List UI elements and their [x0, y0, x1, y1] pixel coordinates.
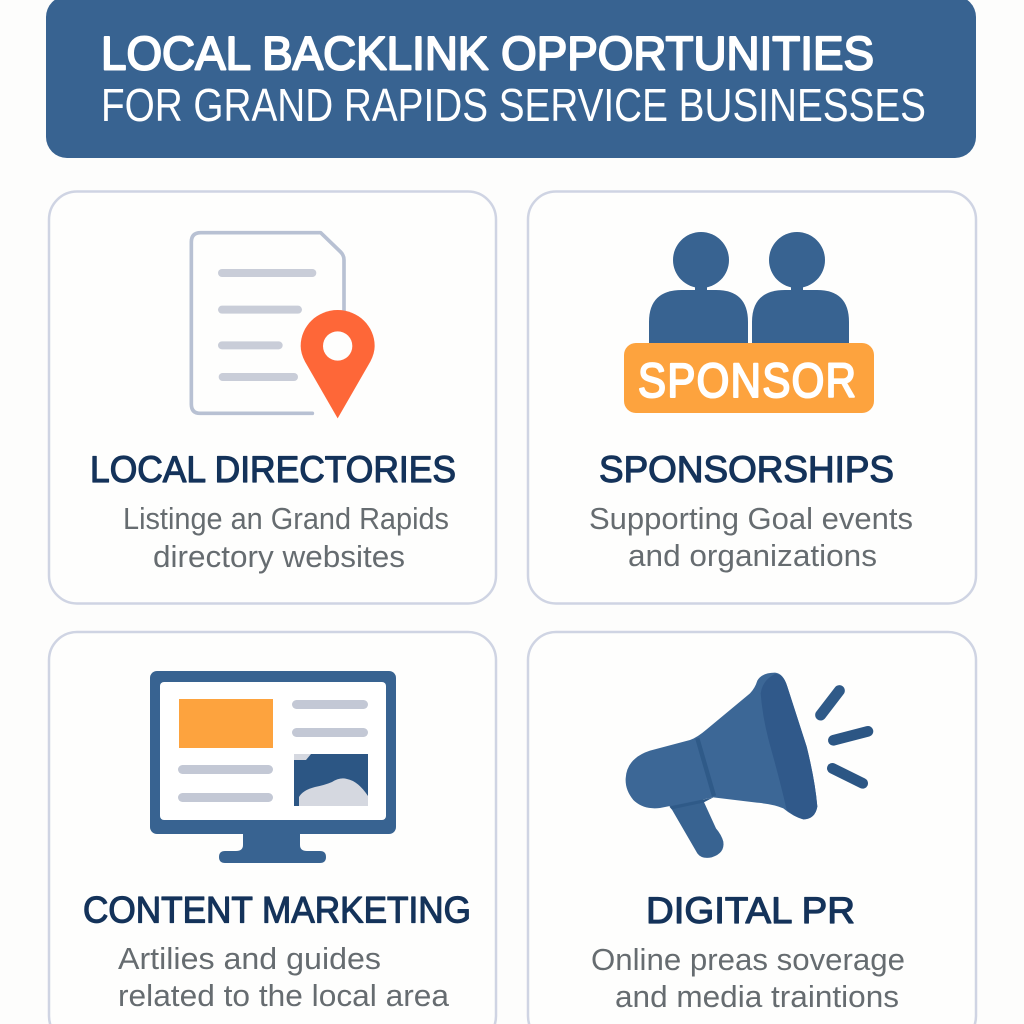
description: local directories: directory websites	[153, 539, 405, 574]
description: sponsorships	[589, 501, 913, 573]
icon: monitor with web page	[150, 671, 396, 863]
panel: content marketing	[49, 632, 496, 1024]
icon: sponsor people with badge	[624, 232, 874, 413]
panel: local directories	[49, 192, 496, 604]
heading: digital pr: DIGITAL PR	[646, 889, 855, 931]
panel: digital pr	[528, 632, 976, 1024]
title banner	[46, 0, 976, 158]
description: content marketing: related to the local area	[118, 978, 450, 1013]
description: content marketing	[118, 941, 450, 1013]
badge text: SPONSOR	[638, 353, 856, 408]
heading: local directories: LOCAL DIRECTORIES	[90, 448, 456, 490]
description: digital pr: and media traintions	[615, 979, 899, 1014]
description: digital pr: Online preas soverage	[591, 942, 905, 977]
description: sponsorships: Supporting Goal events	[589, 501, 913, 536]
title line 1: LOCAL BACKLINK OPPORTUNITIES	[101, 28, 874, 80]
icon: document with map pin	[191, 233, 375, 418]
heading: sponsorships: SPONSORSHIPS	[599, 448, 894, 490]
icon: megaphone	[626, 673, 868, 858]
description: local directories: Listinge an Grand Rapids	[123, 501, 449, 536]
panel: sponsorships	[528, 192, 976, 604]
description: content marketing: Artilies and guides	[118, 941, 381, 976]
description: digital pr	[591, 942, 905, 1014]
heading: content marketing: CONTENT MARKETING	[83, 888, 471, 930]
description: local directories	[123, 501, 449, 574]
description: sponsorships: and organizations	[628, 538, 877, 573]
